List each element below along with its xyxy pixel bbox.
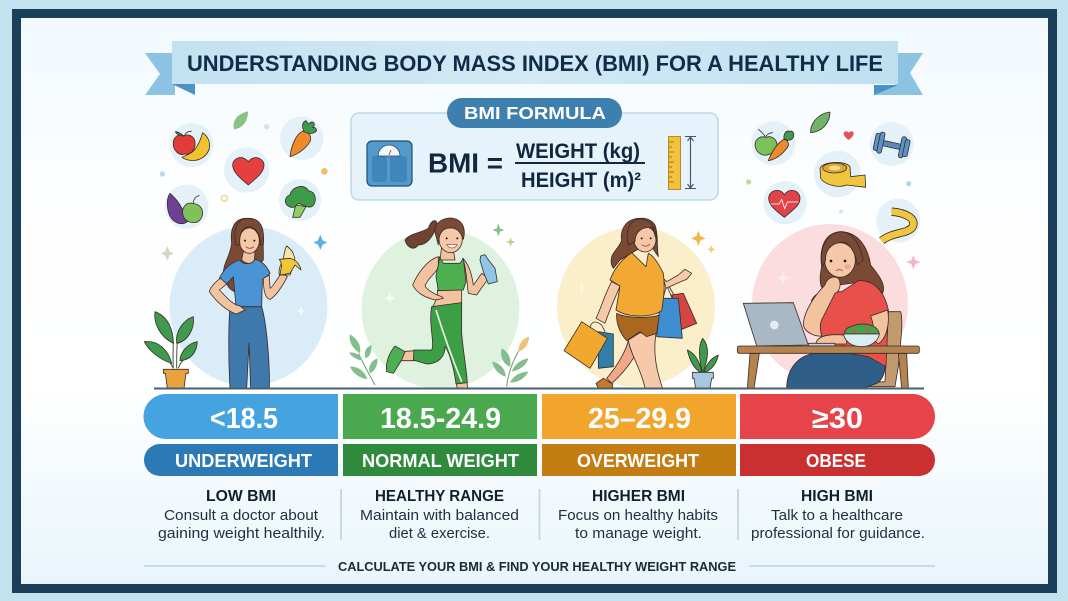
facial features [641, 237, 652, 246]
fraction numerator: WEIGHT (kg) [516, 140, 640, 163]
laptop [743, 303, 835, 346]
icon: apple and carrot [755, 129, 794, 161]
range: normal weight: 18.5-24.9 [380, 403, 501, 435]
shoe [596, 378, 613, 388]
blue shirt [219, 259, 270, 307]
range: underweight [144, 394, 338, 476]
small plant [349, 334, 378, 385]
hair front [627, 219, 657, 245]
range: overweight: 25–29.9 [588, 403, 691, 435]
red bag [672, 293, 697, 329]
hair back [223, 218, 263, 292]
face [634, 227, 656, 252]
ponytail [405, 221, 437, 248]
advice: high BMI: HIGH BMI [801, 488, 873, 505]
icon: heart with pulse [769, 190, 800, 217]
sparkles [161, 235, 327, 316]
sparkles [578, 231, 715, 293]
table [737, 346, 919, 388]
shorts [617, 313, 659, 341]
range: obese: ≥30 [812, 403, 863, 435]
icon: carrot [290, 121, 316, 157]
facial features [244, 240, 255, 248]
dots [746, 179, 911, 214]
facial features [830, 260, 851, 271]
hair top [435, 218, 464, 245]
right arm [463, 258, 488, 295]
icon: leaf [234, 111, 248, 129]
panel: BMI formula [351, 98, 718, 200]
icon: heart [233, 158, 264, 185]
small plant right [492, 337, 529, 387]
left arm on hip [413, 257, 443, 300]
advice: low BMI [158, 488, 325, 542]
figure: normal weight jogger [349, 218, 529, 388]
range: obese: OBESE [806, 451, 866, 471]
calf [401, 351, 415, 361]
raised arm and hand at chin [803, 277, 840, 336]
figure: overweight shopper [564, 218, 718, 388]
icon: broccoli [285, 186, 315, 217]
face [439, 226, 462, 253]
fraction denominator: HEIGHT (m)² [521, 169, 641, 192]
sparkles [384, 223, 515, 304]
BMI equals: BMI = [428, 148, 503, 178]
front leg [628, 333, 663, 388]
footer call to action: CALCULATE YOUR BMI & FIND YOUR HEALTHY WEIGHT RANGE [338, 560, 736, 574]
salad bowl [843, 324, 879, 347]
advice: low BMI: LOW BMI [206, 488, 276, 505]
figure: underweight woman with banana [144, 218, 327, 388]
legs [787, 353, 885, 388]
icon: apple and banana [173, 131, 210, 161]
hair front [235, 218, 264, 245]
icon: ruler and height arrow [668, 136, 696, 190]
leggings [413, 303, 467, 384]
right arm [871, 310, 888, 344]
circle backdrops [170, 224, 908, 389]
jeans [229, 307, 269, 388]
range: underweight: <18.5 [210, 403, 278, 435]
range: overweight: OVERWEIGHT [577, 451, 699, 471]
icon: small heart [844, 131, 854, 140]
teal bag [598, 332, 613, 368]
hair back [820, 232, 884, 293]
title banner [145, 41, 923, 95]
left arm on hip [209, 278, 245, 314]
icon: eggplant and apple [167, 193, 203, 224]
advice: higher BMI: HIGHER BMI [592, 488, 685, 505]
icon: leaf [811, 112, 830, 133]
figures area [144, 218, 921, 389]
potted plant [144, 312, 197, 388]
advice: low BMI: gaining weight healthily. [158, 526, 325, 542]
range: obese [740, 394, 935, 476]
face [825, 243, 855, 277]
orange bag [564, 322, 607, 368]
advice: high BMI: Talk to a healthcare [771, 508, 903, 524]
chair back [843, 312, 902, 387]
figure: obese woman at laptop [737, 232, 921, 388]
advice: high BMI: professional for guidance. [751, 526, 925, 542]
advice: higher BMI: to manage weight. [575, 526, 702, 542]
range: normal weight [343, 394, 537, 476]
advice: healthy range: HEALTHY RANGE [375, 488, 504, 505]
advice: healthy range: diet & exercise. [389, 526, 490, 542]
advice: healthy range [360, 488, 519, 542]
neck [242, 252, 255, 263]
red shirt [810, 281, 888, 367]
sports top [436, 257, 466, 291]
icon: bathroom scale [367, 141, 412, 186]
shin [456, 383, 468, 388]
advice: high BMI [751, 488, 925, 542]
lower arm [596, 282, 620, 323]
advice: higher BMI [558, 488, 718, 542]
neck [440, 247, 455, 260]
dots [160, 124, 328, 201]
advice: low BMI: Consult a doctor about [164, 508, 318, 524]
right health icons [746, 112, 920, 243]
left health icons [160, 111, 328, 229]
advice: higher BMI: Focus on healthy habits [558, 508, 718, 524]
advice: healthy range: Maintain with balanced [360, 508, 519, 524]
potted plant [687, 338, 718, 388]
formula pill [447, 98, 622, 128]
icon bubbles [165, 117, 323, 229]
baseline [154, 388, 924, 390]
water bottle [480, 255, 497, 284]
bag handles [663, 285, 674, 297]
legging stripe [436, 310, 462, 382]
icon bubbles [751, 121, 920, 243]
banana [279, 246, 301, 275]
range: normal weight: NORMAL WEIGHT [362, 451, 519, 471]
hair [611, 218, 658, 268]
title: UNDERSTANDING BODY MASS INDEX (BMI) FOR A HEALTHY LIFE [187, 51, 883, 76]
range: underweight: UNDERWEIGHT [175, 451, 312, 471]
midriff [432, 290, 462, 308]
back leg [607, 332, 640, 383]
facial features [446, 237, 458, 248]
formula pill: BMI FORMULA [464, 103, 606, 123]
fraction line [515, 162, 645, 164]
hand on keyboard [816, 335, 847, 344]
icon: tape measure roll [820, 162, 866, 187]
icon: tape measure ribbon [882, 212, 913, 241]
yellow shirt [610, 253, 664, 316]
icon: dumbbell [872, 131, 911, 159]
bag handles left [590, 322, 605, 332]
raised arm [663, 269, 692, 288]
range: overweight [542, 394, 736, 476]
shoe [386, 346, 405, 373]
sparkles [777, 255, 921, 284]
blue bag [657, 298, 682, 338]
hair front [822, 232, 863, 267]
right arm [263, 273, 287, 299]
face [239, 228, 259, 253]
